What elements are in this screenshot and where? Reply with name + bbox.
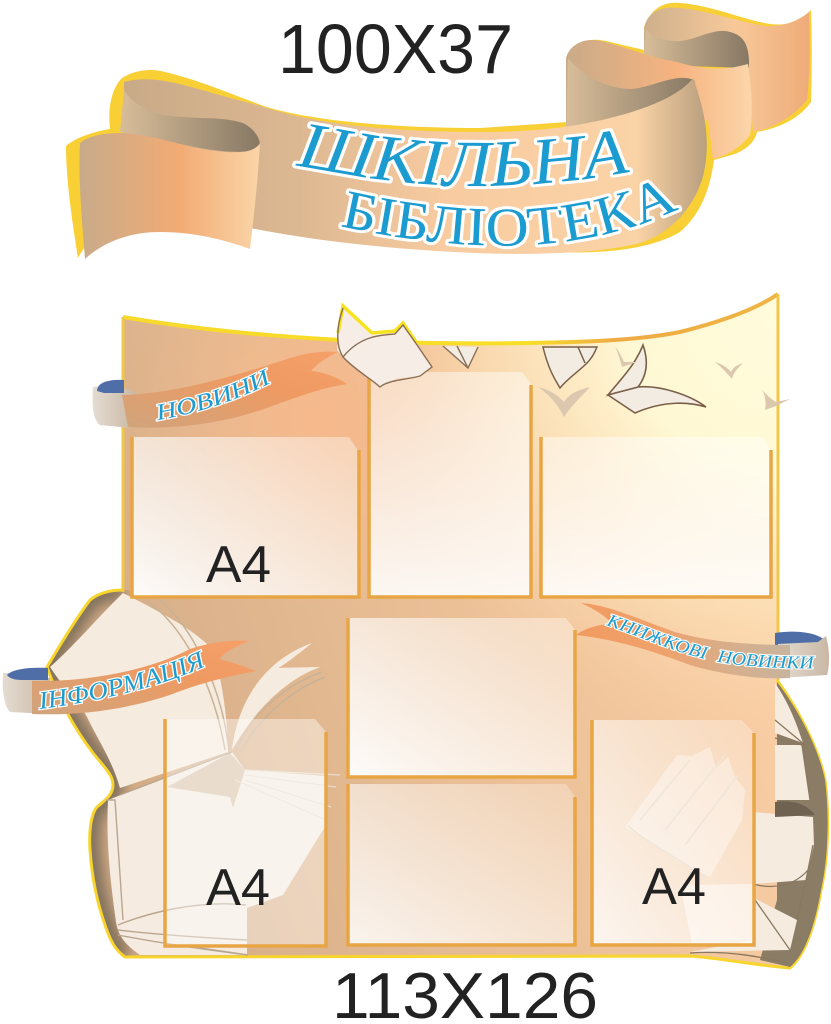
ribbon wrap — [3, 673, 50, 714]
flying pages — [232, 643, 320, 750]
pocket 6 panel — [348, 784, 575, 944]
ribbon label: НОВИНИ — [156, 366, 272, 422]
pocket 4 border — [165, 719, 326, 946]
pocket 4 — [165, 719, 326, 946]
torn page outline — [338, 308, 432, 387]
blue ribbon end — [775, 632, 825, 645]
banner title: БІБЛІОТЕКА: БІБЛІОТЕКА — [338, 180, 682, 250]
pocket 7 — [592, 720, 754, 945]
flying pages — [337, 306, 790, 417]
ribbon: news — [92, 352, 347, 428]
board side edges — [123, 294, 778, 680]
pocket 5 — [348, 618, 575, 777]
book lower pages — [107, 752, 326, 955]
title banner — [66, 2, 812, 259]
right book dark edge — [760, 682, 828, 967]
fanned book in pocket — [625, 747, 745, 877]
book page fan lines — [235, 770, 340, 820]
left fold shadow — [120, 90, 260, 152]
pocket 7 border — [592, 720, 754, 945]
pocket 3 border — [541, 437, 771, 597]
A4 label: A4 — [206, 859, 270, 917]
book upper page — [50, 593, 228, 788]
bird silhouettes — [538, 347, 790, 417]
middle fold — [566, 58, 695, 130]
ribbon label: КНИЖКОВІ НОВИНКИ — [604, 613, 816, 670]
page 3 — [608, 345, 706, 413]
A4 label: A4 — [642, 858, 706, 916]
banner title: ШКІЛЬНА: ШКІЛЬНА — [292, 121, 633, 190]
main ribbon — [124, 78, 707, 254]
pocket 1 — [132, 437, 359, 597]
right book pages — [690, 683, 814, 952]
stand board — [2, 292, 830, 970]
right book lines — [690, 720, 813, 963]
ribbon wrap — [93, 386, 135, 428]
ribbon: information — [2, 640, 256, 714]
left open book — [50, 593, 340, 955]
pocket 3 panel — [541, 437, 771, 596]
pocket 2 — [369, 372, 531, 597]
pocket 2 panel — [369, 372, 531, 596]
middle right ribbon tail — [566, 40, 752, 159]
pocket 5 border — [348, 618, 575, 777]
book page lines — [106, 752, 248, 955]
pocket 5 panel — [348, 618, 575, 776]
left ribbon tail — [79, 133, 260, 259]
left edge shadow — [47, 590, 125, 957]
ribbon wrap — [778, 636, 829, 678]
upper board edge — [123, 294, 778, 343]
pocket 1 panel — [132, 437, 359, 596]
torn page — [337, 308, 432, 387]
far right ribbon fold — [644, 30, 749, 68]
ribbon label: ІНФОРМАЦІЯ — [38, 648, 206, 710]
pocket 3 — [541, 437, 771, 597]
book spine shadow — [167, 753, 245, 808]
page 2 — [543, 347, 597, 388]
pocket 2 border — [369, 372, 531, 597]
lower outline — [47, 590, 828, 968]
torn page yellow edge — [338, 306, 416, 342]
board background with yellow outline — [47, 294, 828, 968]
pocket 7 panel — [592, 720, 754, 944]
size label: banner: 100X37 — [278, 10, 513, 88]
pocket 1 border — [132, 437, 359, 597]
far right ribbon tail — [644, 8, 810, 132]
pocket 6 border — [348, 784, 575, 945]
ribbon body — [122, 352, 347, 428]
cream glow — [340, 294, 778, 760]
peach glow — [123, 317, 520, 620]
A4 label: A4 — [206, 536, 271, 594]
page 1 — [443, 346, 478, 368]
right book dark band — [775, 801, 815, 817]
pocket 4 panel — [165, 719, 326, 946]
ribbon body — [576, 603, 790, 678]
blue ribbon end — [7, 668, 48, 680]
ribbon: book news — [576, 603, 830, 678]
pocket 6 — [348, 784, 575, 945]
fanned book lines — [628, 755, 738, 878]
blue ribbon end — [97, 380, 124, 393]
ribbon body — [32, 641, 256, 714]
banner yellow backing — [66, 3, 812, 258]
right book — [690, 682, 828, 967]
